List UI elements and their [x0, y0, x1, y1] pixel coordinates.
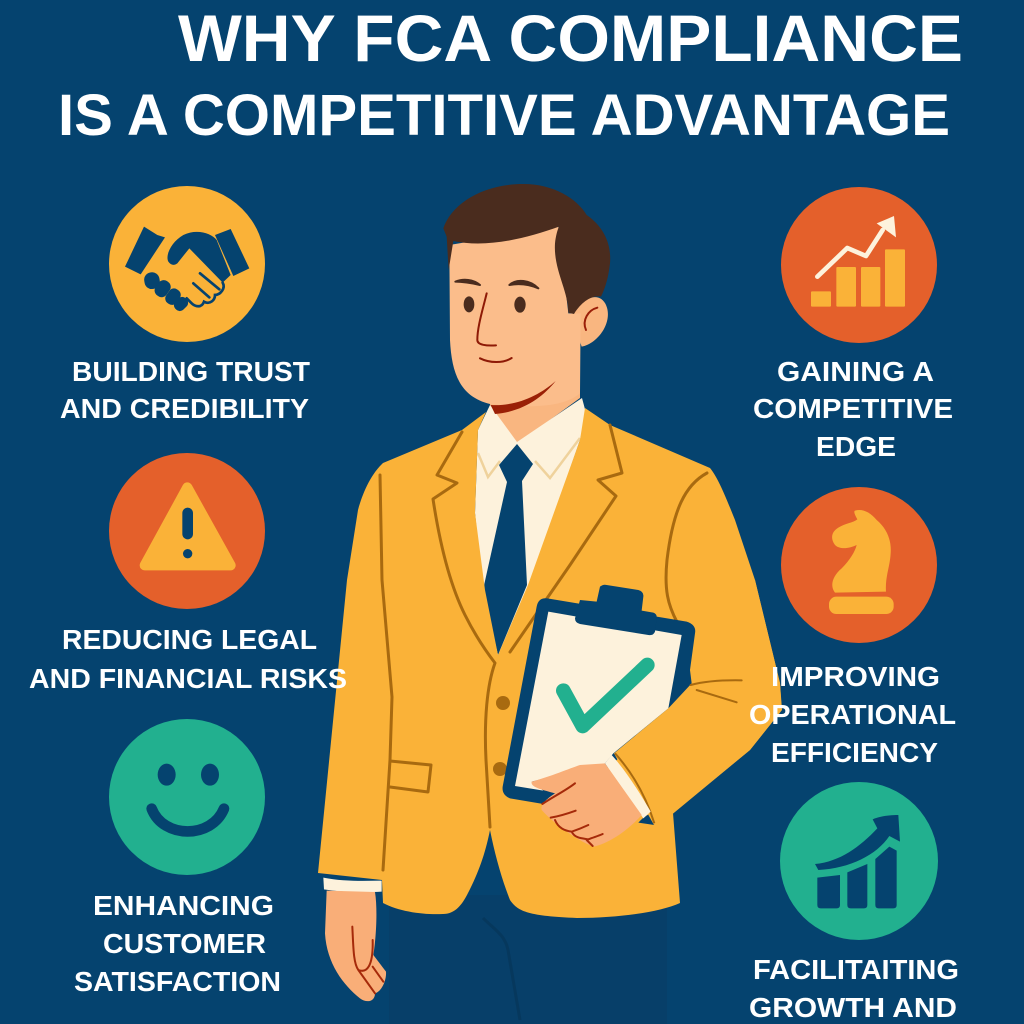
- check mark: [563, 665, 647, 726]
- label: GROWTH AND: [749, 992, 957, 1023]
- jacket: [318, 408, 782, 918]
- label: SATISFACTION: [74, 966, 281, 997]
- hair: [443, 184, 610, 314]
- panel: reducing risks: [29, 453, 347, 694]
- holding hand: [532, 763, 642, 847]
- label: CUSTOMER: [103, 928, 266, 959]
- label: EDGE: [816, 431, 896, 462]
- clipboard: [323, 580, 782, 1001]
- label: COMPETITIVE: [753, 393, 953, 424]
- shirt: [475, 398, 586, 660]
- icon: chess knight: [781, 487, 937, 643]
- eyes: [464, 296, 474, 312]
- collar shadow lines: [478, 438, 580, 478]
- left shirt cuff: [323, 878, 382, 892]
- label: [74, 890, 281, 997]
- left hand: [325, 891, 386, 1001]
- label: ENHANCING: [93, 890, 274, 921]
- label: AND CREDIBILITY: [60, 393, 309, 424]
- jacket seams and lapels: [380, 425, 707, 870]
- label: [753, 356, 953, 462]
- label: OPERATIONAL: [749, 699, 956, 730]
- title: WHY FCA COMPLIANCE: [178, 1, 963, 75]
- panel: building trust: [60, 186, 310, 424]
- chin shadow: [491, 381, 556, 414]
- icon: handshake: [109, 186, 265, 342]
- title: [58, 1, 963, 148]
- neck: [490, 340, 580, 444]
- cuff: [605, 755, 651, 818]
- icon: smiley: [109, 719, 265, 875]
- icon: warning triangle: [109, 453, 265, 609]
- ear: [572, 297, 608, 347]
- icon: growth arrow and bars: [780, 782, 938, 940]
- label: IMPROVING: [771, 661, 940, 692]
- label: [749, 954, 959, 1023]
- tie: [483, 444, 533, 655]
- label: FACILITAITING: [753, 954, 959, 985]
- panel: competitive edge: [753, 187, 953, 462]
- jacket buttons: [493, 696, 510, 776]
- title: IS A COMPETITIVE ADVANTAGE: [58, 83, 950, 148]
- trousers: [389, 895, 667, 1024]
- label: REDUCING LEGAL: [62, 624, 317, 655]
- icon: rising bar chart: [781, 187, 937, 343]
- label: [29, 624, 347, 694]
- label: GAINING A: [777, 356, 934, 387]
- label: AND FINANCIAL RISKS: [29, 663, 347, 694]
- label: EFFICIENCY: [771, 737, 938, 768]
- panel: operational efficiency: [749, 487, 956, 768]
- panel: customer satisfaction: [74, 719, 281, 997]
- nose and mouth: [477, 293, 512, 362]
- label: [749, 661, 956, 768]
- face: [449, 227, 581, 406]
- label: [60, 356, 310, 424]
- forearm: [614, 580, 782, 825]
- eyebrows: [455, 280, 538, 288]
- head: [443, 184, 610, 414]
- panel: facilitating growth: [749, 782, 959, 1023]
- label: BUILDING TRUST: [72, 356, 310, 387]
- figure: businessman with clipboard: [318, 184, 782, 1024]
